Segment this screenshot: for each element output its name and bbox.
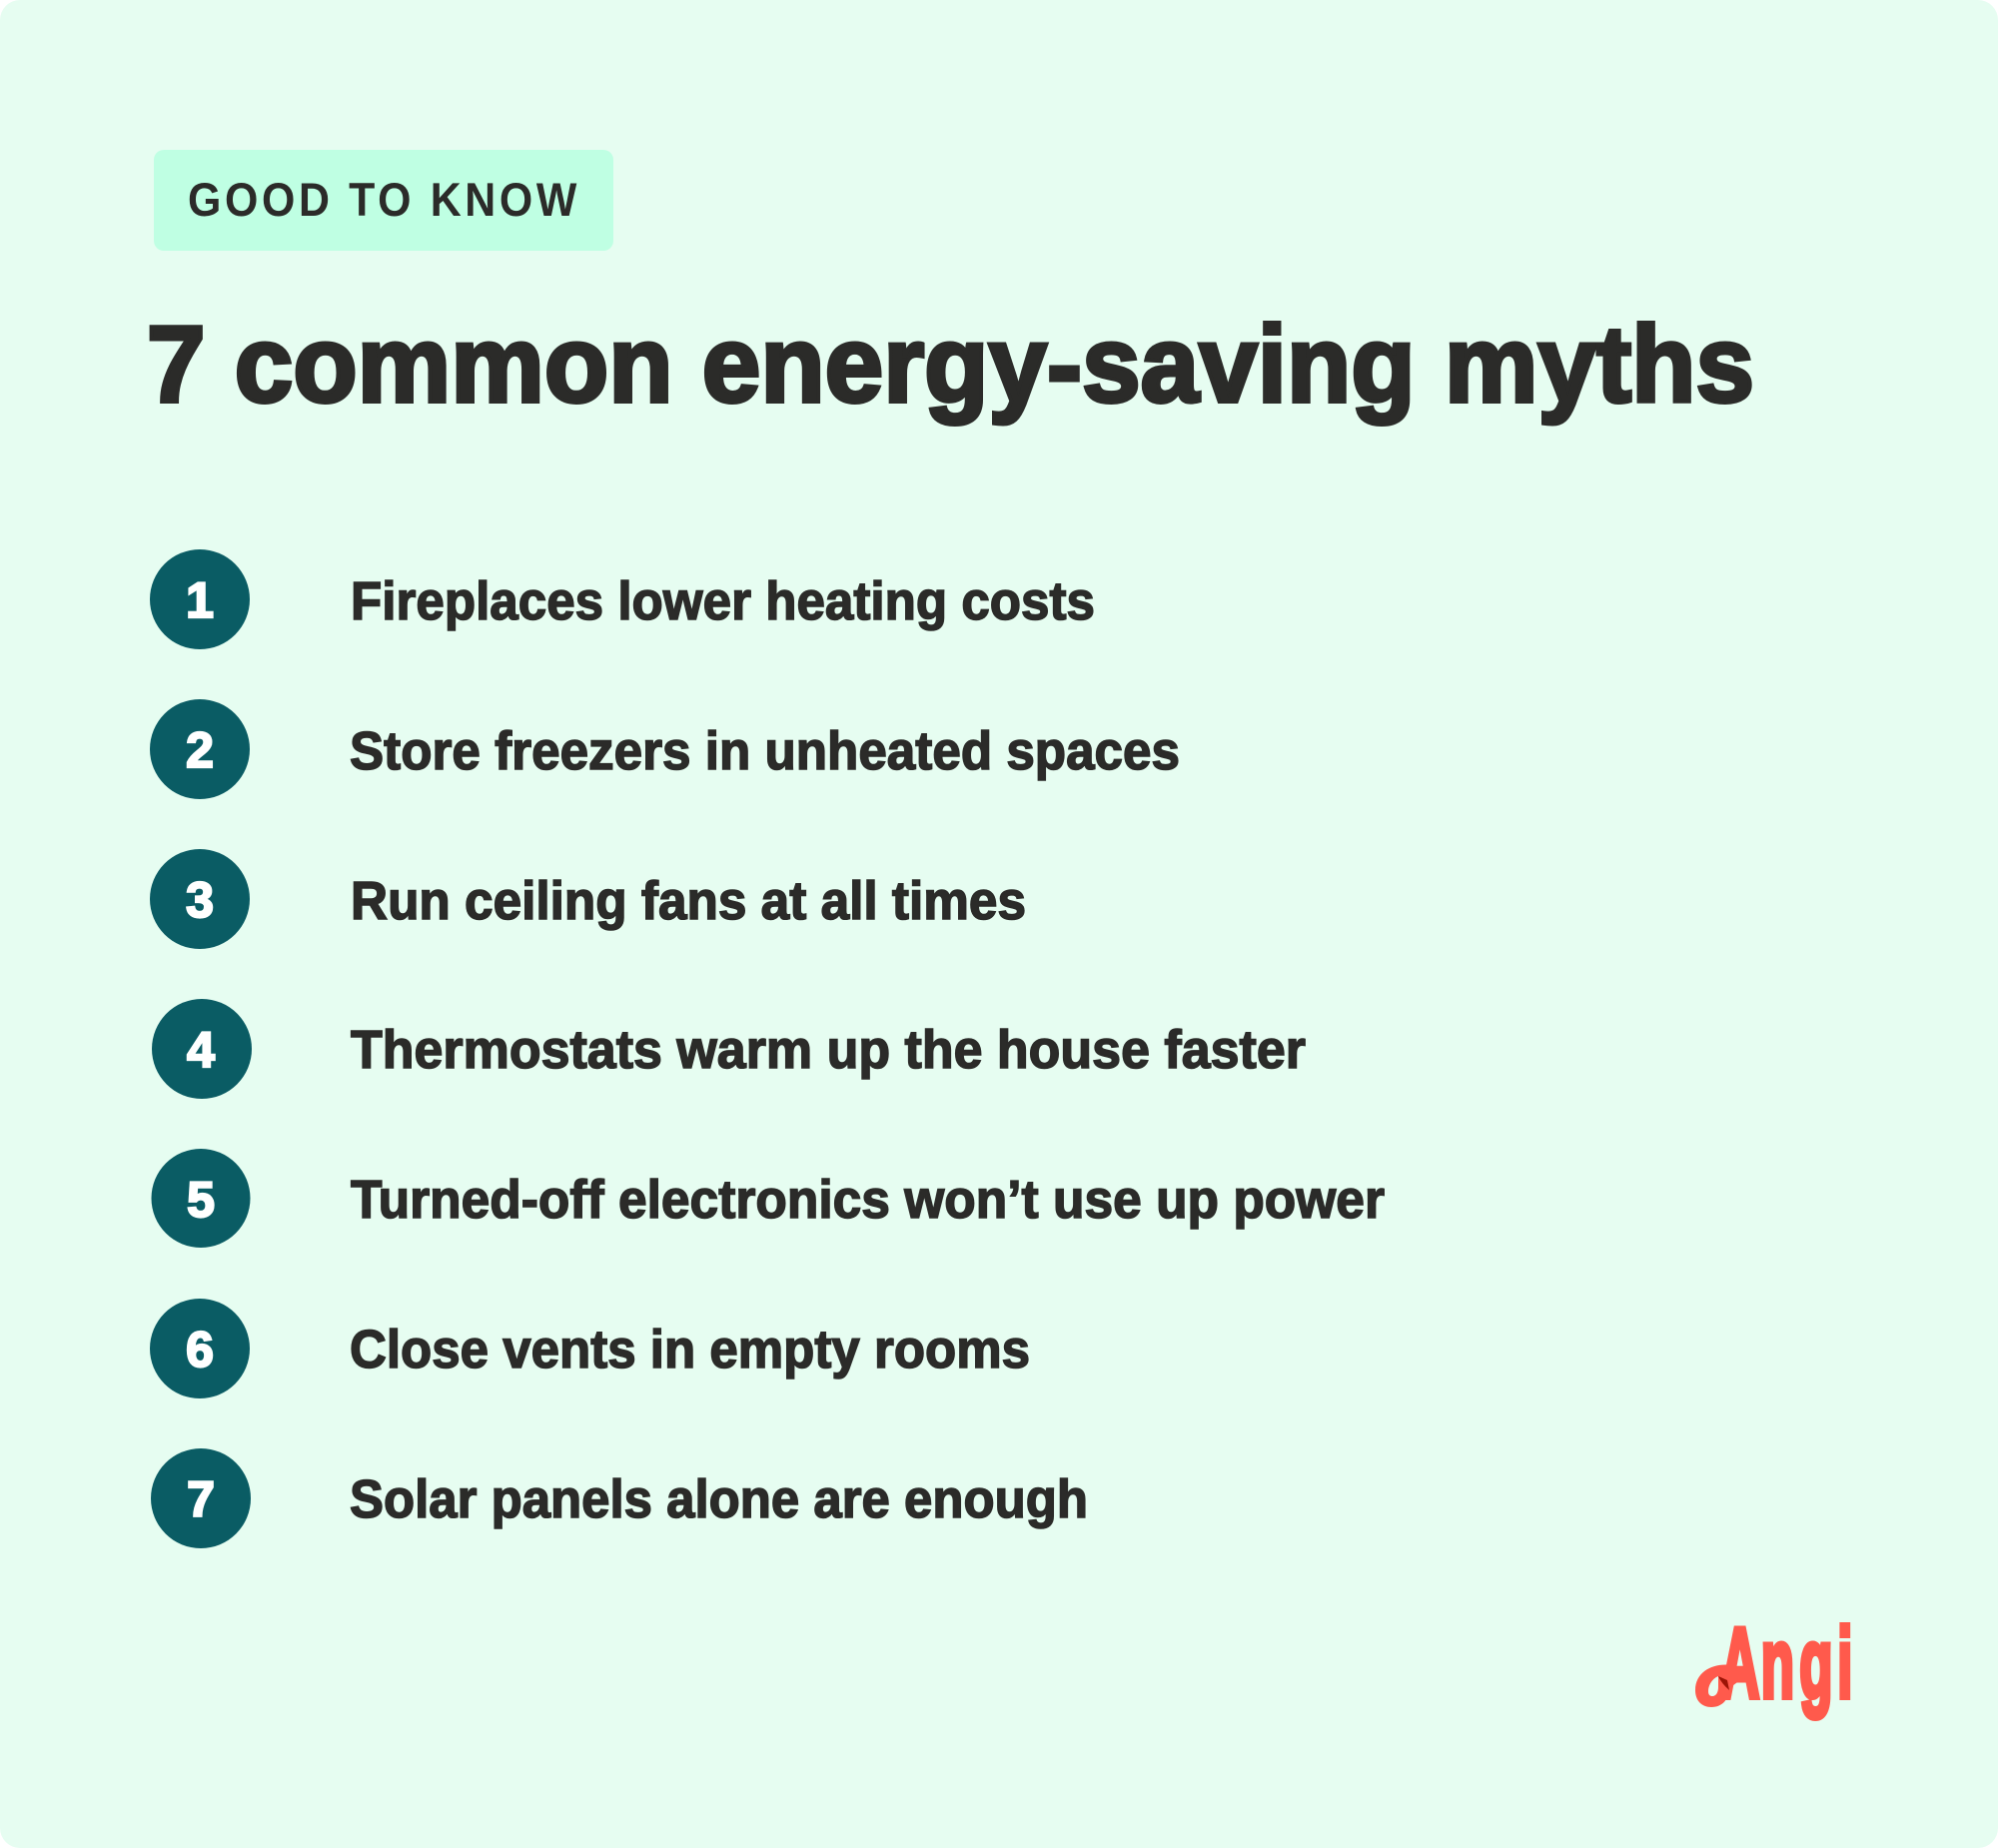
item 5: Turned-off electronics won’t use up power <box>351 1170 1385 1230</box>
item 6 <box>150 1299 1030 1398</box>
badge: good to know: GOOD TO KNOW <box>188 173 580 226</box>
item 5 <box>152 1149 1385 1248</box>
logo: Angi: Angi <box>1720 1608 1852 1718</box>
item 3: Run ceiling fans at all times <box>351 871 1026 931</box>
item 1: Fireplaces lower heating costs <box>351 571 1095 631</box>
item 5: 5 <box>187 1172 215 1228</box>
item 4 <box>152 999 1306 1099</box>
item 3 <box>150 849 1026 949</box>
list of myths <box>150 549 1385 1548</box>
item 2 <box>150 699 1180 799</box>
item 7 <box>151 1448 1088 1548</box>
item 3: 3 <box>186 872 214 928</box>
item 6: Close vents in empty rooms <box>350 1320 1030 1380</box>
item 1: 1 <box>186 572 214 628</box>
item 2: 2 <box>186 722 214 778</box>
item 7: Solar panels alone are enough <box>350 1469 1088 1529</box>
title: 7 common energy-saving myths <box>147 304 1754 426</box>
badge: good to know <box>154 150 613 251</box>
item 4: 4 <box>187 1022 215 1078</box>
item 6: 6 <box>186 1322 214 1378</box>
item 2: Store freezers in unheated spaces <box>350 721 1180 781</box>
item 1 <box>150 549 1095 649</box>
item 7: 7 <box>187 1471 215 1527</box>
item 4: Thermostats warm up the house faster <box>351 1020 1306 1080</box>
